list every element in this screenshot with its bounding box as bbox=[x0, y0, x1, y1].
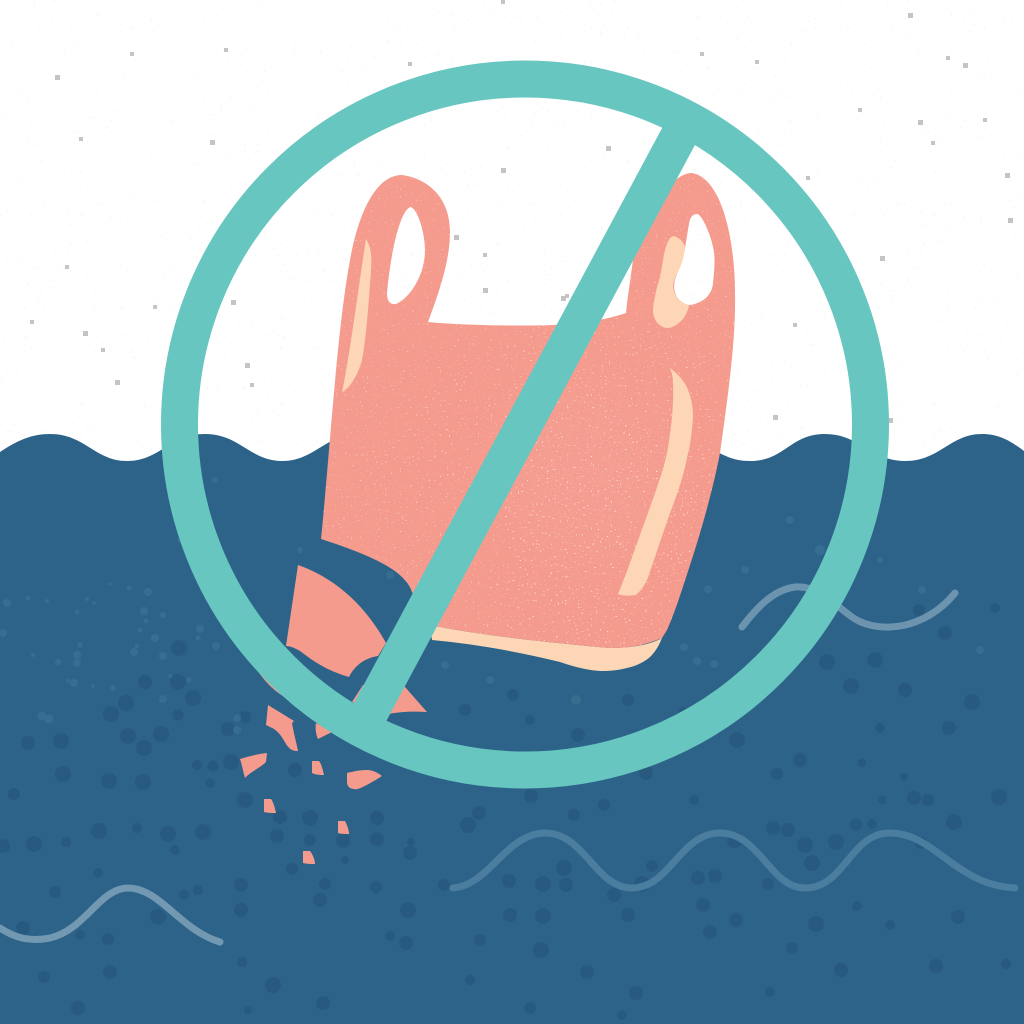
sky speckles bbox=[30, 0, 1013, 423]
bottom centre current line bbox=[453, 833, 1015, 888]
current lines bbox=[0, 587, 1015, 942]
prohibition ring bbox=[180, 79, 870, 770]
upper right current line bbox=[742, 587, 955, 627]
water bubbles bbox=[0, 603, 1011, 1020]
prohibition sign bbox=[180, 79, 870, 770]
bag body with handles bbox=[321, 173, 735, 648]
right side highlight bbox=[618, 368, 693, 596]
torn bag pieces bbox=[240, 565, 427, 864]
left handle highlight bbox=[342, 239, 371, 392]
bag bottom cream band bbox=[430, 625, 662, 671]
sky background bbox=[0, 0, 1024, 470]
bag texture bbox=[320, 170, 740, 660]
ocean water bbox=[0, 434, 1024, 1024]
bottom left current line bbox=[0, 888, 220, 942]
prohibition slash bbox=[368, 130, 682, 716]
plastic bag bbox=[320, 170, 740, 671]
right handle highlight bbox=[653, 236, 689, 328]
faint small bubbles bbox=[0, 477, 984, 734]
